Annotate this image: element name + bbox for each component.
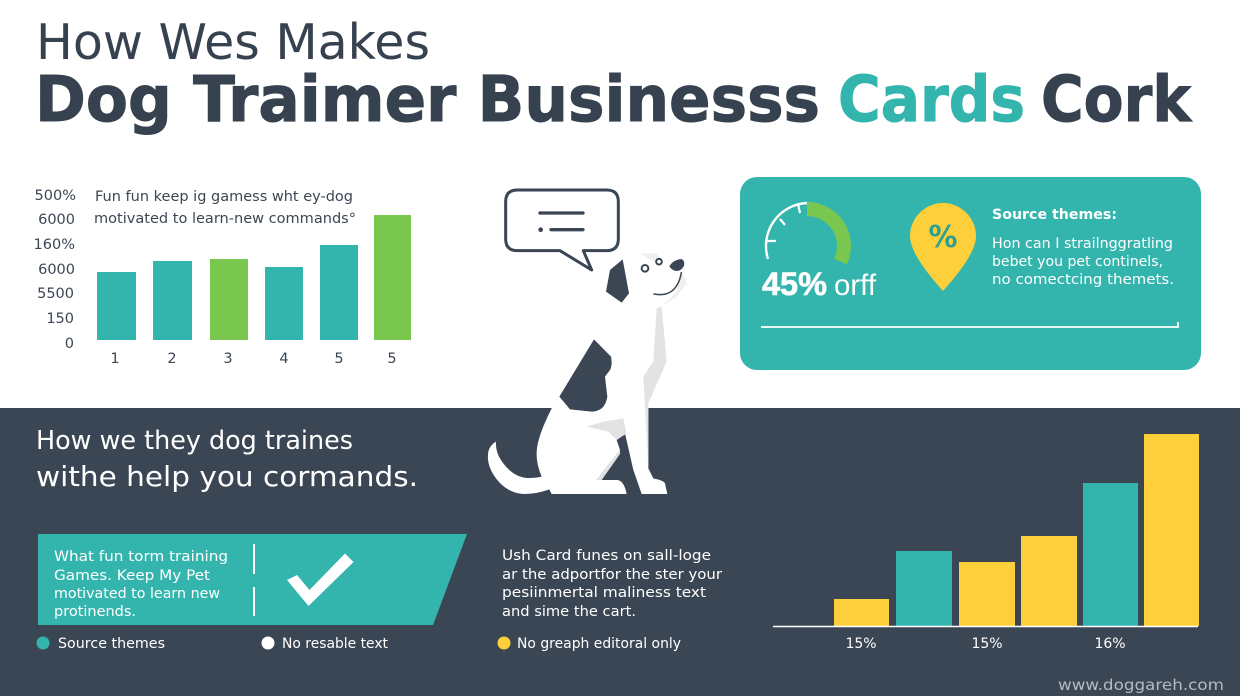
dog body — [488, 253, 687, 494]
discount figure: orff — [834, 269, 877, 302]
x-axis labels: 4 — [279, 351, 289, 367]
source themes text: no comectcing themets. — [992, 272, 1174, 288]
title — [35, 14, 1193, 136]
title: Cork — [1041, 63, 1193, 136]
x-axis labels: 5 — [334, 351, 344, 367]
text block: card tips — [502, 548, 722, 620]
banner text — [54, 549, 228, 620]
text block: card tips: ar the adportfor the ster your — [502, 567, 722, 583]
source themes text: bebet you pet continels, — [992, 254, 1163, 270]
banner: training games — [38, 534, 467, 625]
axis labels: 15% — [971, 636, 1003, 652]
source themes text: Source themes: — [992, 207, 1117, 223]
illustration: sitting dog with speech bubble — [488, 190, 687, 494]
gauge icon — [766, 203, 844, 262]
chart caption — [94, 189, 356, 227]
axis labels: 15% — [845, 636, 877, 652]
dog shading — [587, 307, 667, 480]
y-axis labels: 500% — [35, 188, 76, 204]
axis labels — [845, 636, 1126, 652]
dog spot — [559, 339, 612, 412]
y-axis labels: 6000 — [38, 262, 75, 278]
x-axis labels — [110, 351, 397, 367]
title: Dog Traimer Businesss — [35, 63, 820, 136]
title: How Wes Makes — [36, 14, 430, 71]
text block: card tips: and sime the cart. — [502, 604, 636, 620]
y-axis labels — [34, 188, 76, 352]
bar chart: bottom right — [773, 434, 1199, 652]
dog face — [642, 259, 684, 295]
text block: card tips: pesiinmertal maliness text — [502, 585, 706, 601]
dog ear — [606, 259, 629, 303]
banner text: Games. Keep My Pet — [54, 568, 210, 584]
discount figure — [762, 266, 877, 302]
x-axis labels: 5 — [387, 351, 397, 367]
bars — [97, 215, 411, 340]
chart caption: Fun fun keep ig gamess wht ey-dog — [95, 189, 353, 205]
bars — [834, 434, 1199, 626]
y-axis labels: 6000 — [38, 212, 75, 228]
panel: discount and source themes — [740, 177, 1201, 370]
section heading: How we they dog traines — [36, 426, 353, 456]
source themes text: Hon can I strailnggratling — [992, 236, 1173, 252]
dog head shading — [640, 253, 687, 307]
icon: check mark — [287, 554, 354, 606]
section heading — [36, 426, 418, 493]
axis labels: 16% — [1094, 636, 1126, 652]
y-axis labels: 160% — [34, 237, 75, 253]
y-axis labels: 5500 — [37, 286, 74, 302]
legend: No resable text — [282, 636, 388, 652]
legend: No greaph editoral only — [517, 636, 681, 652]
legend: Source themes — [58, 636, 165, 652]
text block: card tips: Ush Card funes on sall-loge — [502, 548, 711, 564]
x-axis labels: 2 — [167, 351, 177, 367]
bar chart: top left — [34, 188, 411, 367]
panel rule — [761, 322, 1178, 327]
y-axis labels: 150 — [46, 311, 74, 327]
banner text: What fun torm training — [54, 549, 228, 565]
title: Cards — [838, 63, 1025, 136]
y-axis labels: 0 — [65, 336, 74, 352]
icon: percent pin — [910, 203, 976, 291]
legend — [36, 636, 681, 652]
x-axis labels: 3 — [223, 351, 233, 367]
section heading: withe help you cormands. — [36, 460, 418, 493]
website url: www.doggareh.com — [1058, 676, 1224, 694]
chart caption: motivated to learn-new commands° — [94, 211, 356, 227]
banner text: motivated to learn new — [54, 586, 220, 602]
discount figure: 45% — [762, 266, 827, 302]
banner text: protinends. — [54, 604, 136, 620]
speech bubble — [506, 190, 618, 270]
icon: percent pin: % — [928, 220, 958, 255]
source themes text — [992, 207, 1174, 288]
x-axis labels: 1 — [110, 351, 120, 367]
